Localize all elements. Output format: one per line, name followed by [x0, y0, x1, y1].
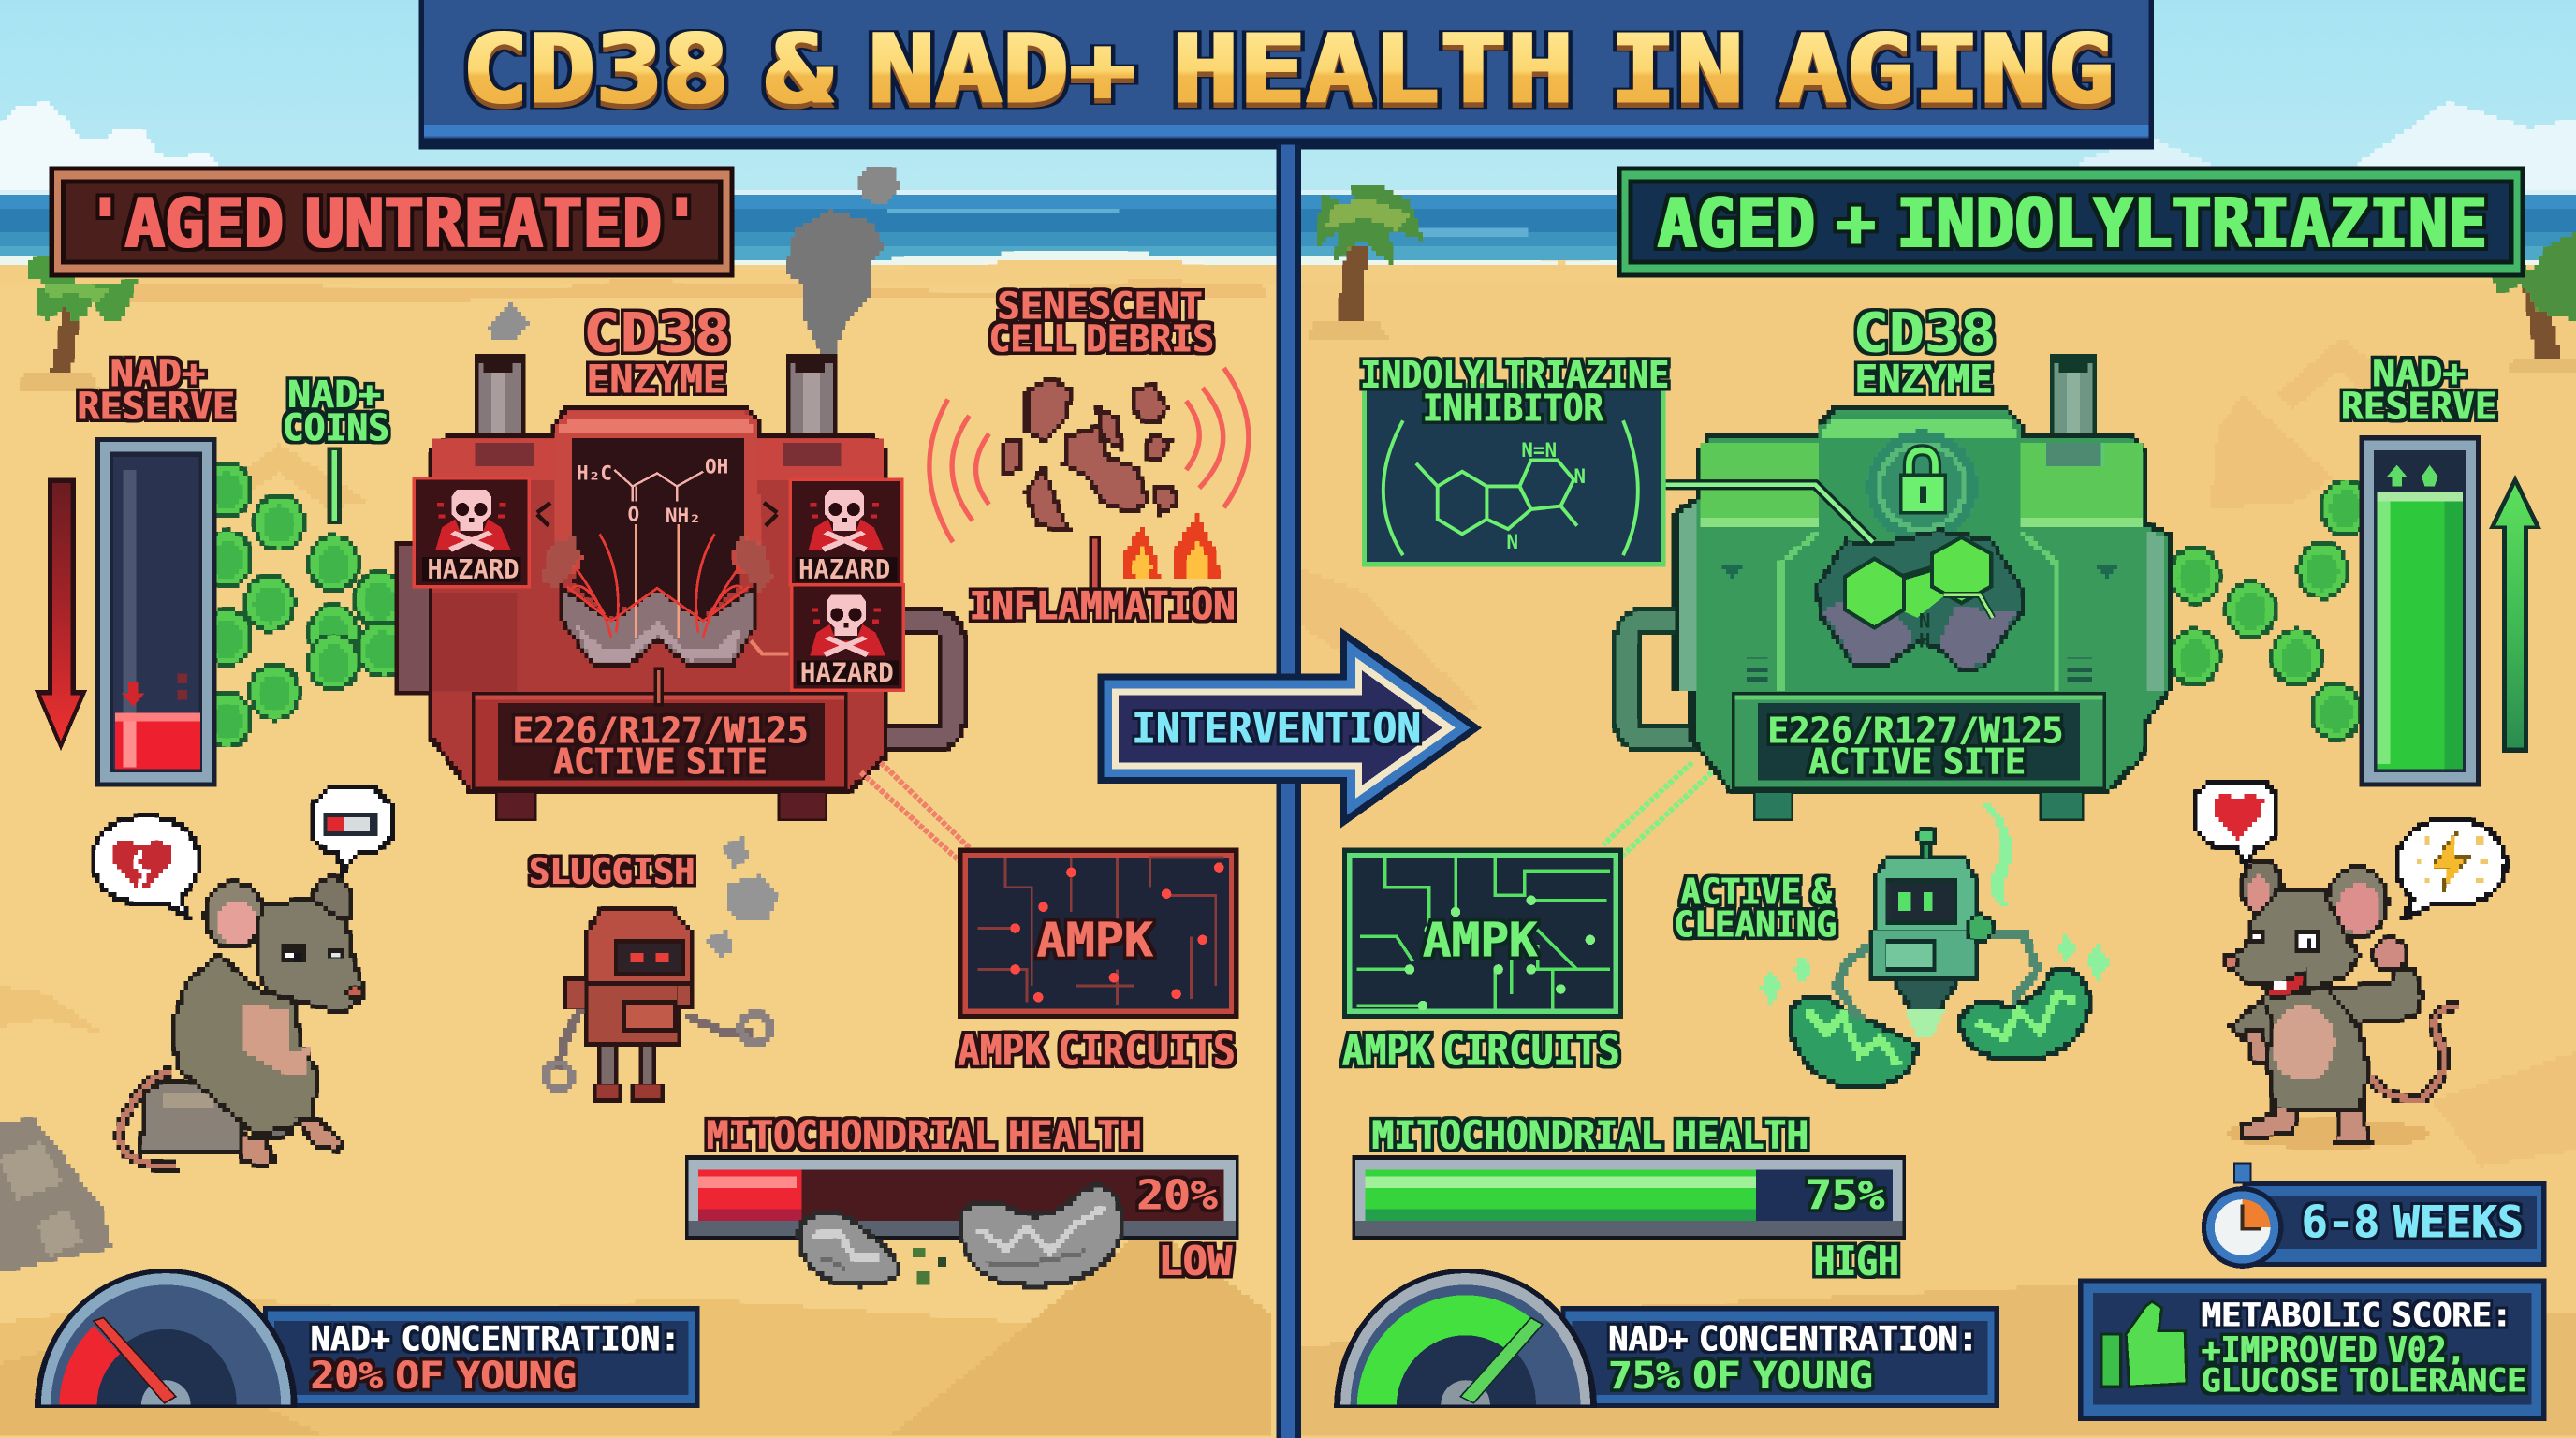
- hazard sign: left: HAZARD: [427, 554, 520, 585]
- robot: active and cleaning: [1837, 829, 2037, 1038]
- ampk circuit board: treated: AMPK: [1423, 913, 1538, 968]
- metabolic score panel: METABOLIC SCORE:: [2202, 1296, 2511, 1334]
- rat: tired and aged: [120, 877, 361, 1167]
- rock: [0, 1117, 111, 1273]
- ampk circuit board: treated: [1342, 848, 1623, 1019]
- substrate molecule: NH₂: [666, 504, 701, 527]
- metabolic score panel: GLUCOSE TOLERANCE: [2202, 1362, 2526, 1401]
- mitochondrial health bar: treated: 75%: [1806, 1172, 1885, 1220]
- center divider: [1277, 144, 1301, 1438]
- cd38 machine: treated: [1627, 355, 2169, 820]
- nad+ reserve label: treated: [2341, 351, 2497, 429]
- inflammation label: INFLAMMATION: [970, 583, 1236, 629]
- nad+ coins: untreated: [200, 460, 409, 749]
- bound inhibitor in active cavity: N: [1919, 609, 1931, 632]
- cd38 machine: untreated: [394, 355, 953, 820]
- reserve tube: low: [95, 437, 217, 787]
- cd38 enzyme label: untreated: [583, 301, 731, 402]
- sluggish smoke puffs: [707, 838, 777, 956]
- machine active site panel: [472, 668, 848, 820]
- nad+ coins label: COINS: [283, 405, 389, 449]
- gauge readout panel: 20% OF YOUNG: [311, 1354, 577, 1398]
- inflammation flames: [1123, 514, 1219, 579]
- machine active site panel: [1732, 692, 2106, 820]
- gauge readout panel: NAD+ CONCENTRATION:: [311, 1319, 681, 1359]
- smoke plumes: [490, 165, 900, 353]
- cd38 enzyme label: treated: ENZYME: [1854, 356, 1993, 402]
- inhibitor panel: INDOLYLTRIAZINE: [1360, 353, 1669, 397]
- lasers: cd38 to ampk, treated: [1603, 762, 1712, 861]
- inflammation label: [970, 536, 1236, 629]
- header text: aged untreated: 'AGED UNTREATED': [85, 183, 701, 262]
- intervention arrow: [1097, 627, 1482, 829]
- lasers: cd38 to ampk, untreated: [861, 762, 970, 861]
- metabolic score panel: [2078, 1278, 2546, 1421]
- duration badge: [2202, 1164, 2546, 1269]
- active and cleaning label: ACTIVE &: [1680, 871, 1833, 913]
- speech bubble: low battery: [313, 788, 391, 873]
- damaged mitochondria: [799, 1187, 1122, 1285]
- gauge readout panel: NAD+ CONCENTRATION:: [1608, 1319, 1978, 1359]
- high label: HIGH: [1814, 1238, 1899, 1285]
- palm tree: left: [20, 253, 138, 391]
- hazard sign: right bottom: [790, 583, 905, 692]
- inhibitor panel: N: [1506, 530, 1518, 553]
- nad+ coins label: [283, 373, 389, 524]
- active and cleaning label: CLEANING: [1674, 903, 1837, 946]
- senescent cell debris: [929, 284, 1249, 629]
- icon: thumbs up: [2101, 1301, 2187, 1387]
- debris label: SENESCENT: [997, 284, 1203, 328]
- title banner: [419, 0, 2154, 150]
- ampk circuit board: untreated: AMPK: [1036, 913, 1153, 968]
- reserve tube: high: [2359, 435, 2481, 787]
- hazard sign: right bottom: HAZARD: [800, 657, 894, 688]
- bound inhibitor in active cavity: [1845, 537, 1993, 652]
- rat: healthy and flexing: [2224, 861, 2459, 1149]
- title text: CD38 & NAD+ HEALTH IN AGING: [461, 15, 2115, 125]
- panel header: aged + indolyltriazine: [1617, 166, 2525, 278]
- intervention arrow: INTERVENTION: [1132, 703, 1421, 753]
- inhibitor molecule: [1383, 420, 1638, 555]
- substrate molecule: O: [627, 502, 639, 525]
- cd38 enzyme label: treated: CD38: [1853, 301, 1996, 365]
- machine active site panel: ACTIVE SITE: [1808, 741, 2026, 784]
- speech bubble: energy bolt: [2397, 818, 2505, 918]
- robot: sluggish: [546, 907, 770, 1099]
- inhibitor panel: N: [1573, 464, 1586, 488]
- mitochondrial health bar: treated: [1352, 1112, 1906, 1240]
- nad+ reserve label: untreated: [78, 351, 235, 429]
- machine active site panel: ACTIVE SITE: [554, 741, 768, 784]
- machine body sprite: [394, 355, 953, 792]
- sluggish label: SLUGGISH: [529, 851, 695, 893]
- icon: stopwatch: [2202, 1164, 2284, 1269]
- speech bubble: broken heart: [94, 816, 198, 917]
- debris label: [989, 284, 1214, 361]
- pointer line from inhibitor: [1666, 485, 1873, 542]
- header text: aged + indolyltriazine: AGED + INDOLYLTRIAZINE: [1658, 183, 2487, 262]
- gauge readout panel: 75% OF YOUNG: [1608, 1354, 1873, 1398]
- gauge readout panel: [263, 1306, 700, 1408]
- cd38 enzyme label: untreated: CD38: [583, 301, 731, 365]
- nad+ coins label: NAD+: [287, 373, 381, 417]
- hazard sign: right top: [788, 478, 903, 587]
- nad+ coins: treated: [2169, 478, 2372, 741]
- low label: LOW: [1158, 1238, 1233, 1285]
- nad+ reserve label: treated: NAD+: [2372, 351, 2466, 395]
- arrow: reserve falling: [35, 478, 87, 751]
- inhibitor panel: INHIBITOR: [1423, 386, 1604, 430]
- mitochondrial health bar: untreated: MITOCHONDRIAL HEALTH: [707, 1112, 1142, 1158]
- debris fragments: [1003, 378, 1177, 529]
- machine active site panel: E226/R127/W125: [1767, 710, 2063, 752]
- palm tree: right panel left: [1308, 187, 1423, 339]
- lock icon: [1899, 450, 1947, 514]
- cd38 enzyme label: treated: [1853, 301, 1996, 402]
- inhibitor panel: [1360, 353, 1669, 566]
- machine body sprite: [1627, 355, 2169, 792]
- hazard sign: left: [413, 477, 531, 588]
- nad+ reserve label: untreated: RESERVE: [78, 385, 235, 429]
- mitochondrial health bar: untreated: [685, 1112, 1238, 1240]
- gauge readout panel: [1560, 1306, 1999, 1408]
- debris label: CELL DEBRIS: [989, 317, 1214, 361]
- debris radiating arcs: [929, 368, 1249, 542]
- machine active site panel: E226/R127/W125: [513, 710, 809, 752]
- cd38 enzyme label: untreated: ENZYME: [587, 356, 726, 402]
- mitochondrial health bar: untreated: 20%: [1137, 1172, 1218, 1220]
- ampk circuits label: treated: AMPK CIRCUITS: [1342, 1025, 1620, 1075]
- active and cleaning label: [1674, 871, 1837, 946]
- panel header: aged untreated: [50, 166, 735, 278]
- arrow: reserve rising: [2489, 475, 2541, 753]
- mitochondrial health bar: treated: MITOCHONDRIAL HEALTH: [1372, 1112, 1808, 1158]
- duration badge: 6-8 WEEKS: [2302, 1197, 2524, 1249]
- ampk circuit board: untreated: [958, 848, 1238, 1019]
- nad+ reserve label: treated: RESERVE: [2341, 385, 2497, 429]
- substrate molecule: H₂C: [577, 461, 612, 484]
- substrate molecule: OH: [705, 454, 728, 477]
- cleaning sparkles and squiggle: [1761, 801, 2110, 1005]
- nad+ reserve label: untreated: NAD+: [110, 351, 205, 395]
- bound inhibitor in active cavity: H: [1919, 628, 1931, 652]
- inhibitor panel: N=N: [1521, 438, 1557, 462]
- healthy green mitochondria: [1791, 970, 2089, 1088]
- nad+ gauge: treated: [1334, 1269, 1999, 1408]
- speech bubble: heart: [2197, 782, 2276, 864]
- hazard sign: right top: HAZARD: [798, 554, 890, 585]
- palm tree: far right: [2489, 233, 2576, 374]
- substrate molecule: [537, 454, 788, 654]
- metabolic score panel: +IMPROVED V02,: [2202, 1329, 2466, 1372]
- nad+ gauge: untreated: [35, 1269, 700, 1408]
- ampk circuits label: untreated: AMPK CIRCUITS: [958, 1025, 1236, 1075]
